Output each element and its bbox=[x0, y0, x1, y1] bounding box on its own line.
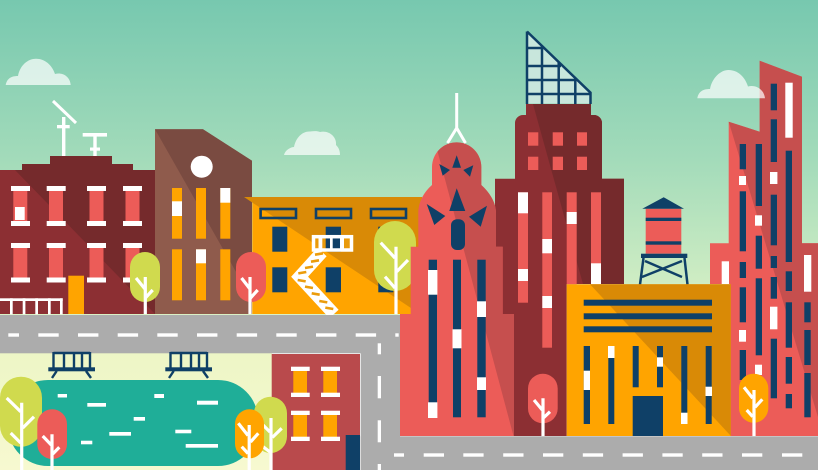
right tower navy windows bbox=[740, 84, 811, 417]
tree: lime by pond bbox=[0, 377, 42, 470]
brown tower windows bbox=[172, 188, 230, 300]
cloud: middle bbox=[284, 131, 340, 155]
roads bbox=[0, 315, 818, 470]
tree: orange right of pond bbox=[235, 409, 264, 470]
ground bbox=[0, 353, 272, 470]
horizontal navy bands bbox=[584, 300, 712, 332]
tree: red by skyscraper bbox=[528, 374, 558, 436]
bench: left bbox=[48, 352, 95, 378]
building: brown tower bbox=[155, 129, 252, 314]
pond ripples bbox=[58, 394, 218, 448]
building: small red bottom bbox=[272, 354, 360, 470]
tree: lime by apartment bbox=[130, 252, 160, 314]
cloud: right bbox=[697, 70, 765, 98]
bench: right bbox=[165, 352, 212, 378]
tower triangle ornaments bbox=[427, 155, 487, 250]
tree: red by pond bbox=[37, 409, 67, 470]
glass crown bbox=[527, 32, 590, 104]
tree: large lime bbox=[374, 221, 416, 314]
navy windows bbox=[272, 227, 393, 292]
building: orange fire escape block bbox=[244, 197, 422, 314]
water tower bbox=[640, 197, 688, 284]
pond bbox=[8, 380, 258, 466]
skyscraper window columns bbox=[518, 192, 601, 348]
brown tower round window bbox=[191, 156, 213, 178]
tree: red by orange block bbox=[236, 252, 266, 314]
building: red art-deco tower bbox=[400, 140, 520, 436]
spire bbox=[448, 93, 466, 143]
fence bbox=[0, 298, 63, 314]
small building windows bbox=[293, 371, 337, 437]
building: right red tower bbox=[710, 61, 818, 436]
upper window slots bbox=[261, 209, 406, 218]
fire escape bbox=[298, 237, 352, 314]
road markings: bottom road bbox=[394, 453, 802, 457]
navy window columns bbox=[584, 346, 712, 424]
building: dark red skyscraper bbox=[495, 104, 630, 436]
small building door bbox=[346, 435, 360, 470]
building: maroon apartment bbox=[0, 156, 155, 314]
tree: orange by right tower bbox=[739, 374, 768, 436]
maroon apartment windows bbox=[11, 186, 142, 282]
cloud: left bbox=[6, 59, 71, 85]
skyscraper top windows bbox=[528, 132, 587, 170]
road markings: vertical road bbox=[378, 343, 381, 470]
right tower white windows bbox=[722, 83, 811, 375]
tree: lime right of pond bbox=[254, 397, 287, 470]
lower block door bbox=[633, 396, 663, 436]
road markings: top road bbox=[8, 333, 399, 337]
building: lower orange block bbox=[567, 284, 731, 436]
antennas bbox=[53, 101, 107, 157]
tower window columns bbox=[429, 260, 486, 417]
maroon apartment door bbox=[68, 276, 84, 314]
sky background bbox=[0, 0, 818, 320]
